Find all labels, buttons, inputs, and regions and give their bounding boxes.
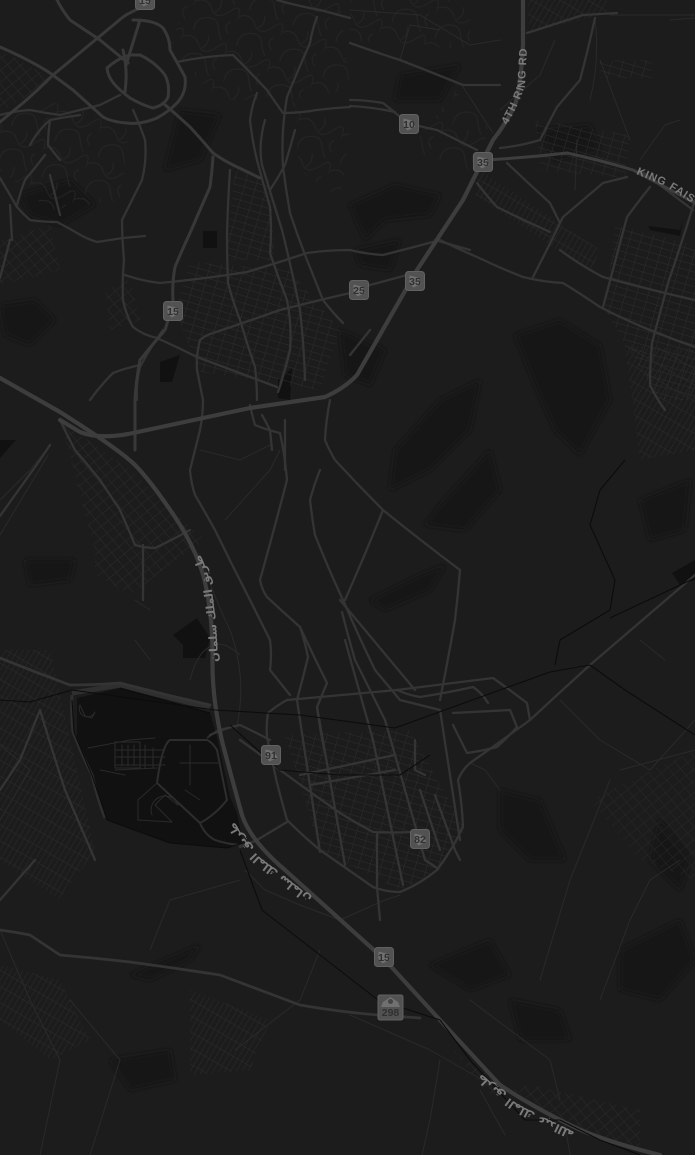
park: dark walled compound bbox=[72, 685, 243, 848]
road label: Arabic north: طريق الملك سلمان bbox=[195, 556, 220, 662]
badge 35 upper bbox=[474, 152, 492, 172]
4th Ring Road bbox=[60, 0, 523, 436]
badge 35 lower: 35 bbox=[409, 276, 421, 288]
badge 82 bbox=[410, 830, 430, 848]
road label: Arabic centre: طريق الملك سلمان bbox=[230, 823, 312, 900]
Highway 15 (King Salman Road) bbox=[0, 378, 660, 1155]
badge 25: 25 bbox=[353, 285, 365, 297]
badge 82: 82 bbox=[414, 834, 426, 846]
dark built-up patches bbox=[0, 218, 695, 658]
King Faisal road bbox=[483, 153, 695, 203]
badge 15 south bbox=[374, 948, 394, 966]
badge 15 north bbox=[136, 0, 154, 10]
badge 10 bbox=[400, 114, 418, 134]
wadi lines bbox=[0, 460, 695, 1155]
road label: 4TH RING RD: 4TH RING RD bbox=[502, 48, 527, 124]
badge 35 lower bbox=[406, 272, 424, 290]
road label: Arabic south: طريق الملك عبدالله bbox=[480, 1075, 574, 1136]
badge 25 bbox=[350, 280, 368, 300]
badge 298 bbox=[378, 995, 403, 1020]
badge 91: 91 bbox=[265, 750, 277, 762]
badge 15 west: 15 bbox=[167, 306, 179, 318]
badge 10: 10 bbox=[403, 119, 415, 131]
badge 91 bbox=[262, 746, 280, 764]
main highways bbox=[0, 0, 260, 450]
badge 298: 298 bbox=[382, 1007, 399, 1019]
badge 15 south: 15 bbox=[378, 952, 390, 964]
badge 15 west bbox=[164, 302, 182, 320]
badge 35 upper: 35 bbox=[477, 157, 489, 169]
